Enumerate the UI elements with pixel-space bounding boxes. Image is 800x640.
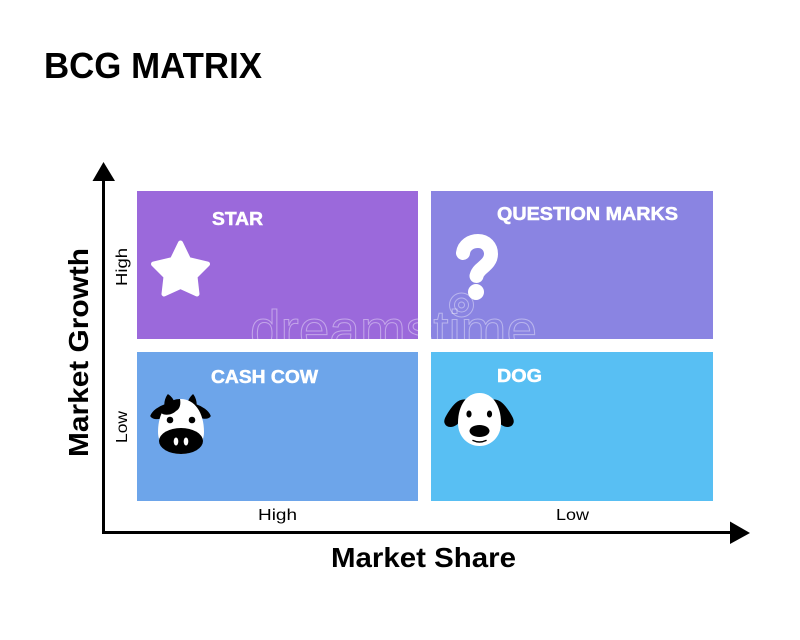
panel: question marks (431, 191, 713, 339)
title: BCG MATRIX (44, 45, 262, 86)
x axis title: Market Share (331, 542, 516, 573)
heading: dog: DOG (497, 366, 542, 386)
y tick: low: Low (114, 411, 131, 443)
cow patch (161, 399, 180, 415)
x tick: high: High (258, 507, 297, 524)
heading: cash cow: CASH COW (211, 367, 318, 387)
x tick: low: Low (556, 507, 589, 524)
icon: star (154, 243, 208, 294)
cow horns and ears (151, 395, 210, 418)
panel: dog (431, 352, 713, 501)
icon: question mark (463, 241, 491, 300)
x axis arrow (102, 522, 750, 544)
watermark: dreamstime (250, 300, 537, 360)
y axis title: Market Growth (63, 248, 94, 457)
heading: question marks: QUESTION MARKS (497, 204, 678, 224)
icon: dog (445, 393, 513, 446)
heading: star: STAR (212, 209, 263, 229)
y tick: high: High (114, 248, 131, 286)
panel: star (137, 191, 418, 339)
y axis arrow (92, 162, 115, 532)
icon: cow (151, 395, 210, 454)
panel: cash cow (137, 352, 418, 501)
